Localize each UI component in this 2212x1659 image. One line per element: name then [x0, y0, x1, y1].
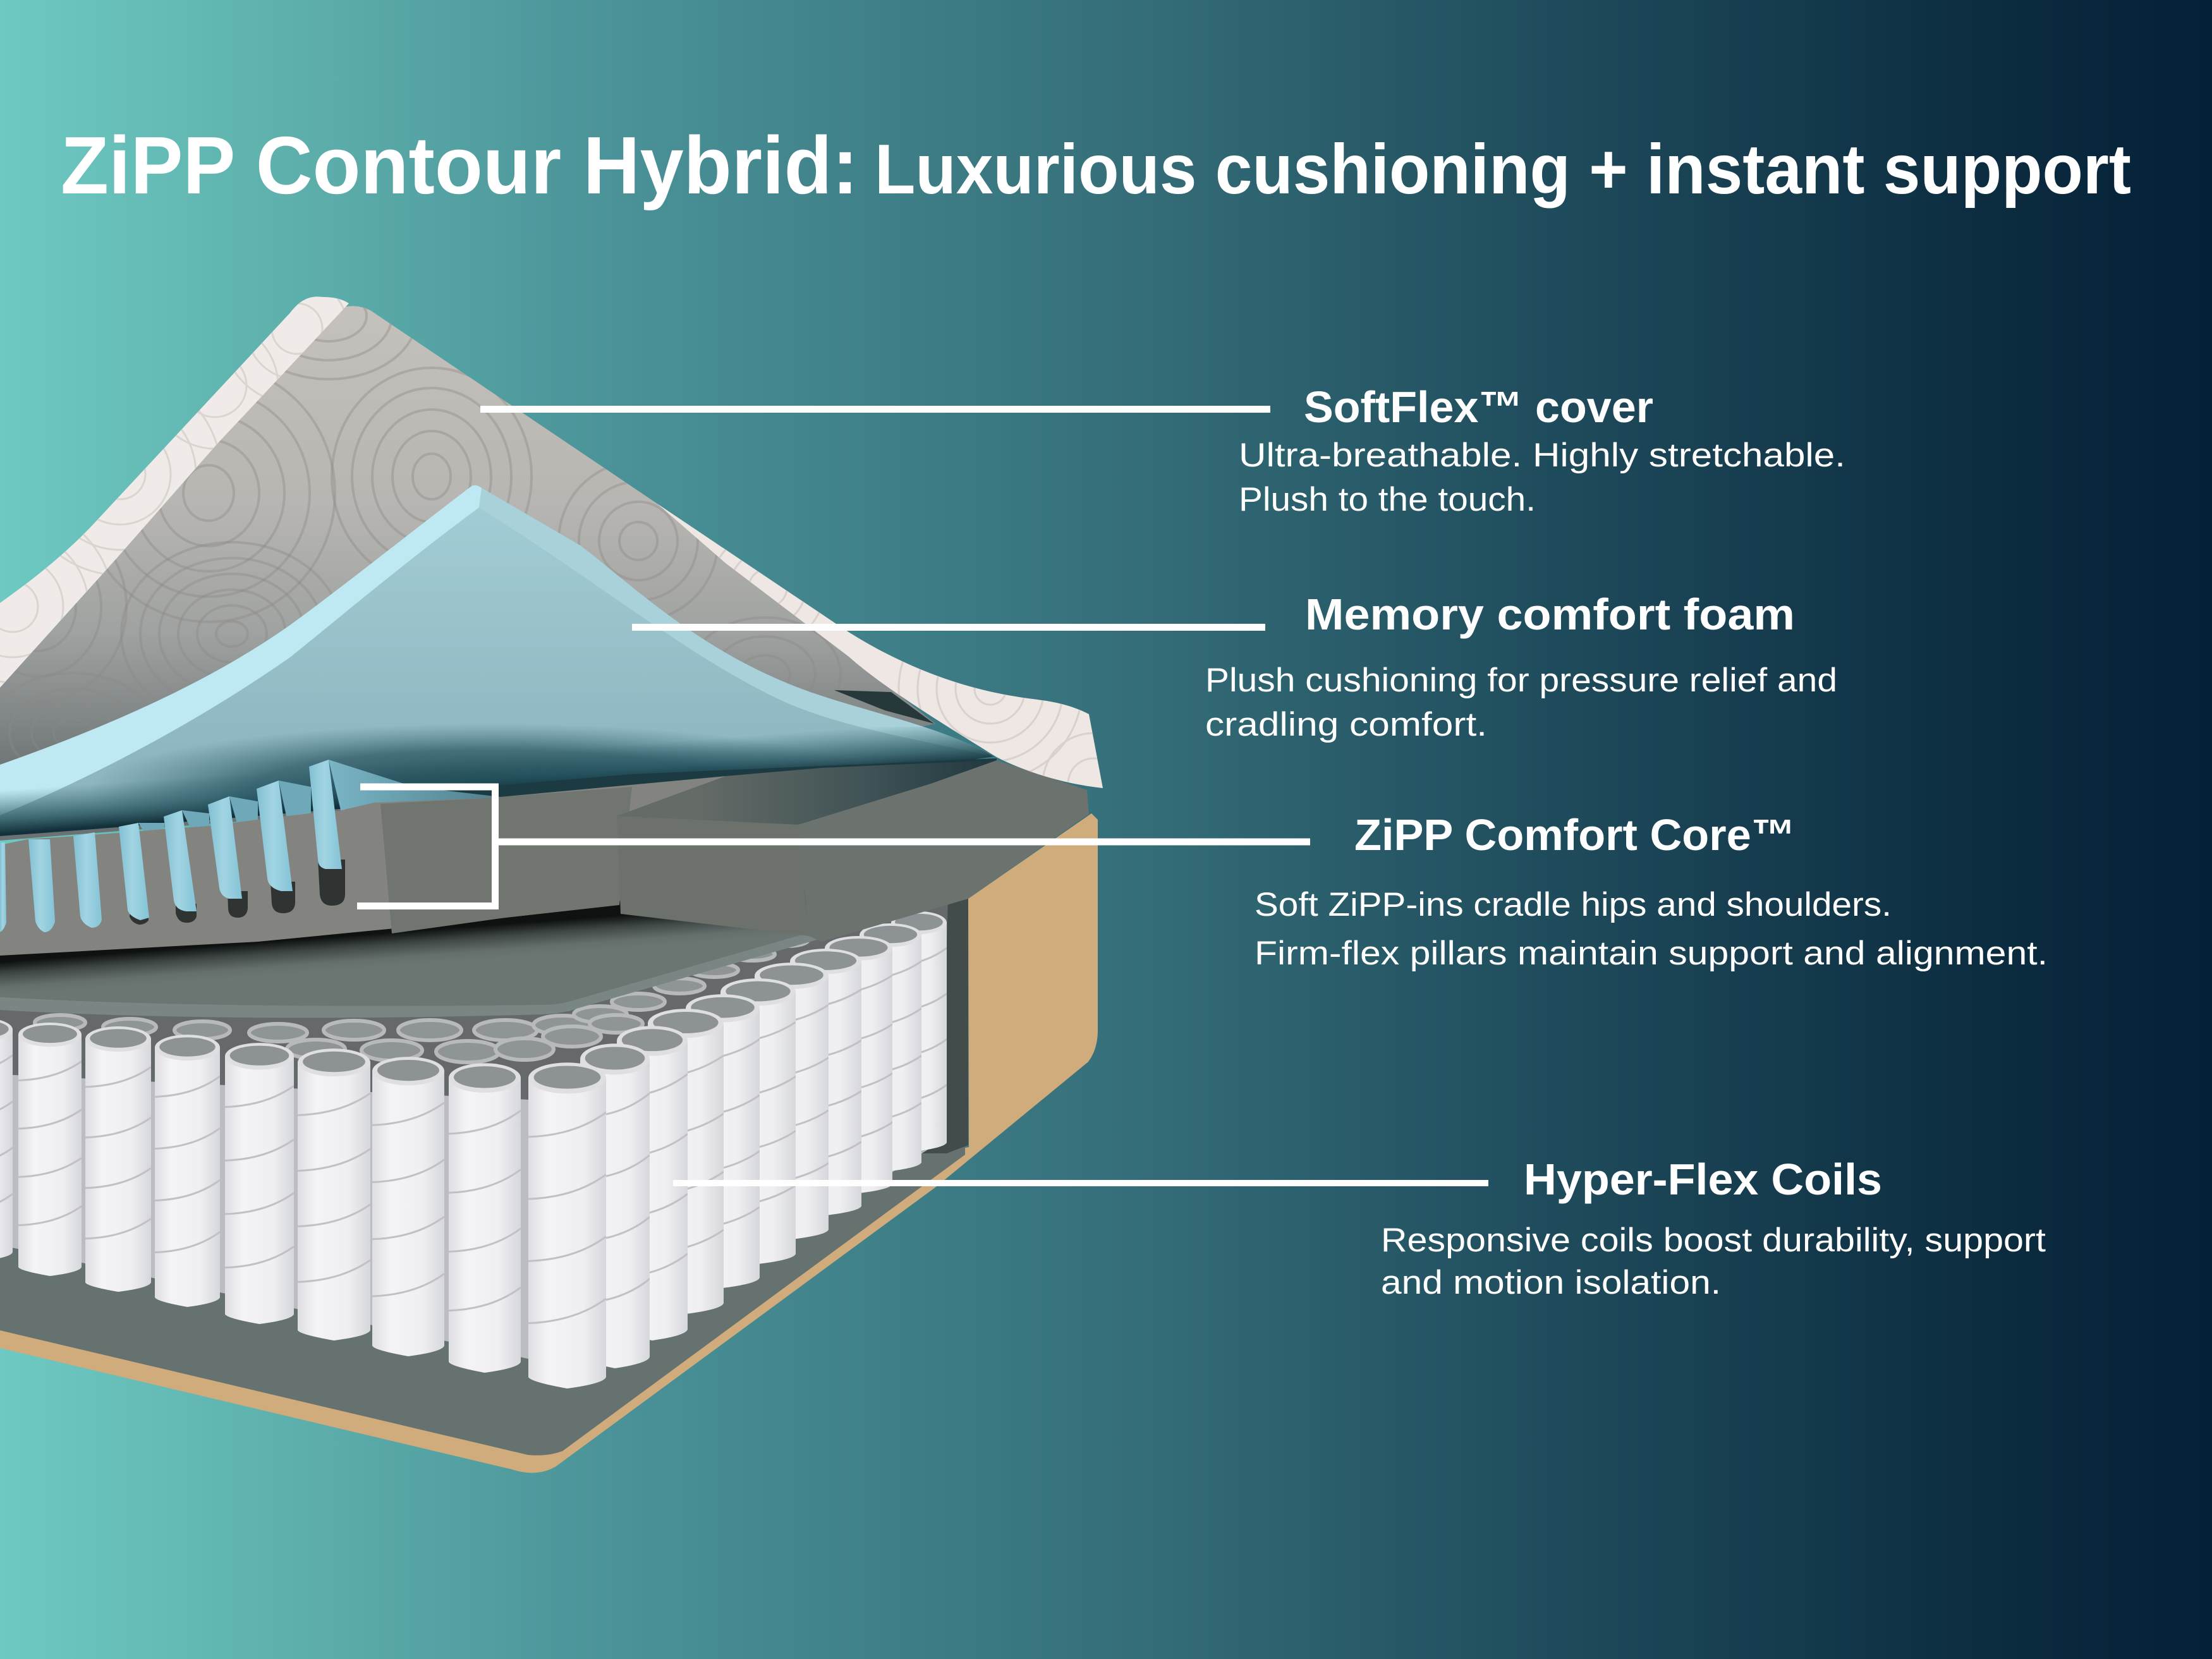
zipp-in slots and blue pillars: [0, 760, 345, 932]
block right section shading: [380, 787, 632, 933]
heading: Hyper-Flex Coils: [1524, 1155, 1882, 1204]
description: cradling comfort.: [1205, 706, 1487, 743]
mattress tan side wall and base edge: [0, 813, 1098, 1473]
inner back wall: [923, 885, 968, 1153]
slotted gray foam: [0, 776, 726, 956]
thin gray transition sheet: [0, 882, 967, 1018]
leader line: [632, 624, 1265, 631]
pocket coils: [0, 897, 948, 1389]
gray base layer: [0, 1074, 965, 1455]
description: [1239, 437, 1845, 518]
description: Plush to the touch.: [1239, 481, 1536, 518]
heading: SoftFlex™ cover: [1304, 382, 1653, 432]
description: [1205, 662, 1837, 743]
callout: ZiPP Comfort Core: [357, 787, 2048, 972]
mattress cutaway illustration: [0, 253, 1144, 1473]
title: Luxurious cushioning + instant support: [875, 130, 2131, 209]
dark gap behind comfort core: [354, 758, 997, 822]
ZiPP comfort core with blue zipp-ins: [0, 760, 726, 956]
zipp-in back faces: [138, 760, 506, 834]
description: and motion isolation.: [1381, 1264, 1721, 1301]
description: Responsive coils boost durability, support: [1381, 1222, 2046, 1259]
heading: ZiPP Comfort Core™: [1354, 810, 1796, 860]
callout: SoftFlex cover: [480, 382, 1845, 518]
cover underside with swirl pattern: [0, 253, 935, 841]
description: Plush cushioning for pressure relief and: [1205, 662, 1837, 699]
heading: Memory comfort foam: [1305, 590, 1795, 639]
description: Soft ZiPP-ins cradle hips and shoulders.: [1255, 886, 1892, 923]
firm-flex pillar block: [617, 760, 1089, 942]
leader line: [673, 1180, 1488, 1186]
description: [1255, 886, 2048, 972]
cover white quilted edge, left: [0, 296, 349, 688]
callout: Hyper-Flex Coils: [673, 1155, 2046, 1301]
leader line: [480, 406, 1270, 413]
description: Ultra-breathable. Highly stretchable.: [1239, 437, 1845, 474]
bracket and leader line: [357, 787, 1310, 906]
cover white flap, right: [657, 504, 1103, 788]
description: Firm-flex pillars maintain support and alignment.: [1255, 935, 2048, 972]
title: [61, 120, 2131, 211]
callout: Memory comfort foam: [632, 590, 1837, 743]
memory comfort foam layer: [0, 485, 1011, 856]
title: ZiPP Contour Hybrid:: [61, 120, 858, 211]
description: [1381, 1222, 2046, 1301]
